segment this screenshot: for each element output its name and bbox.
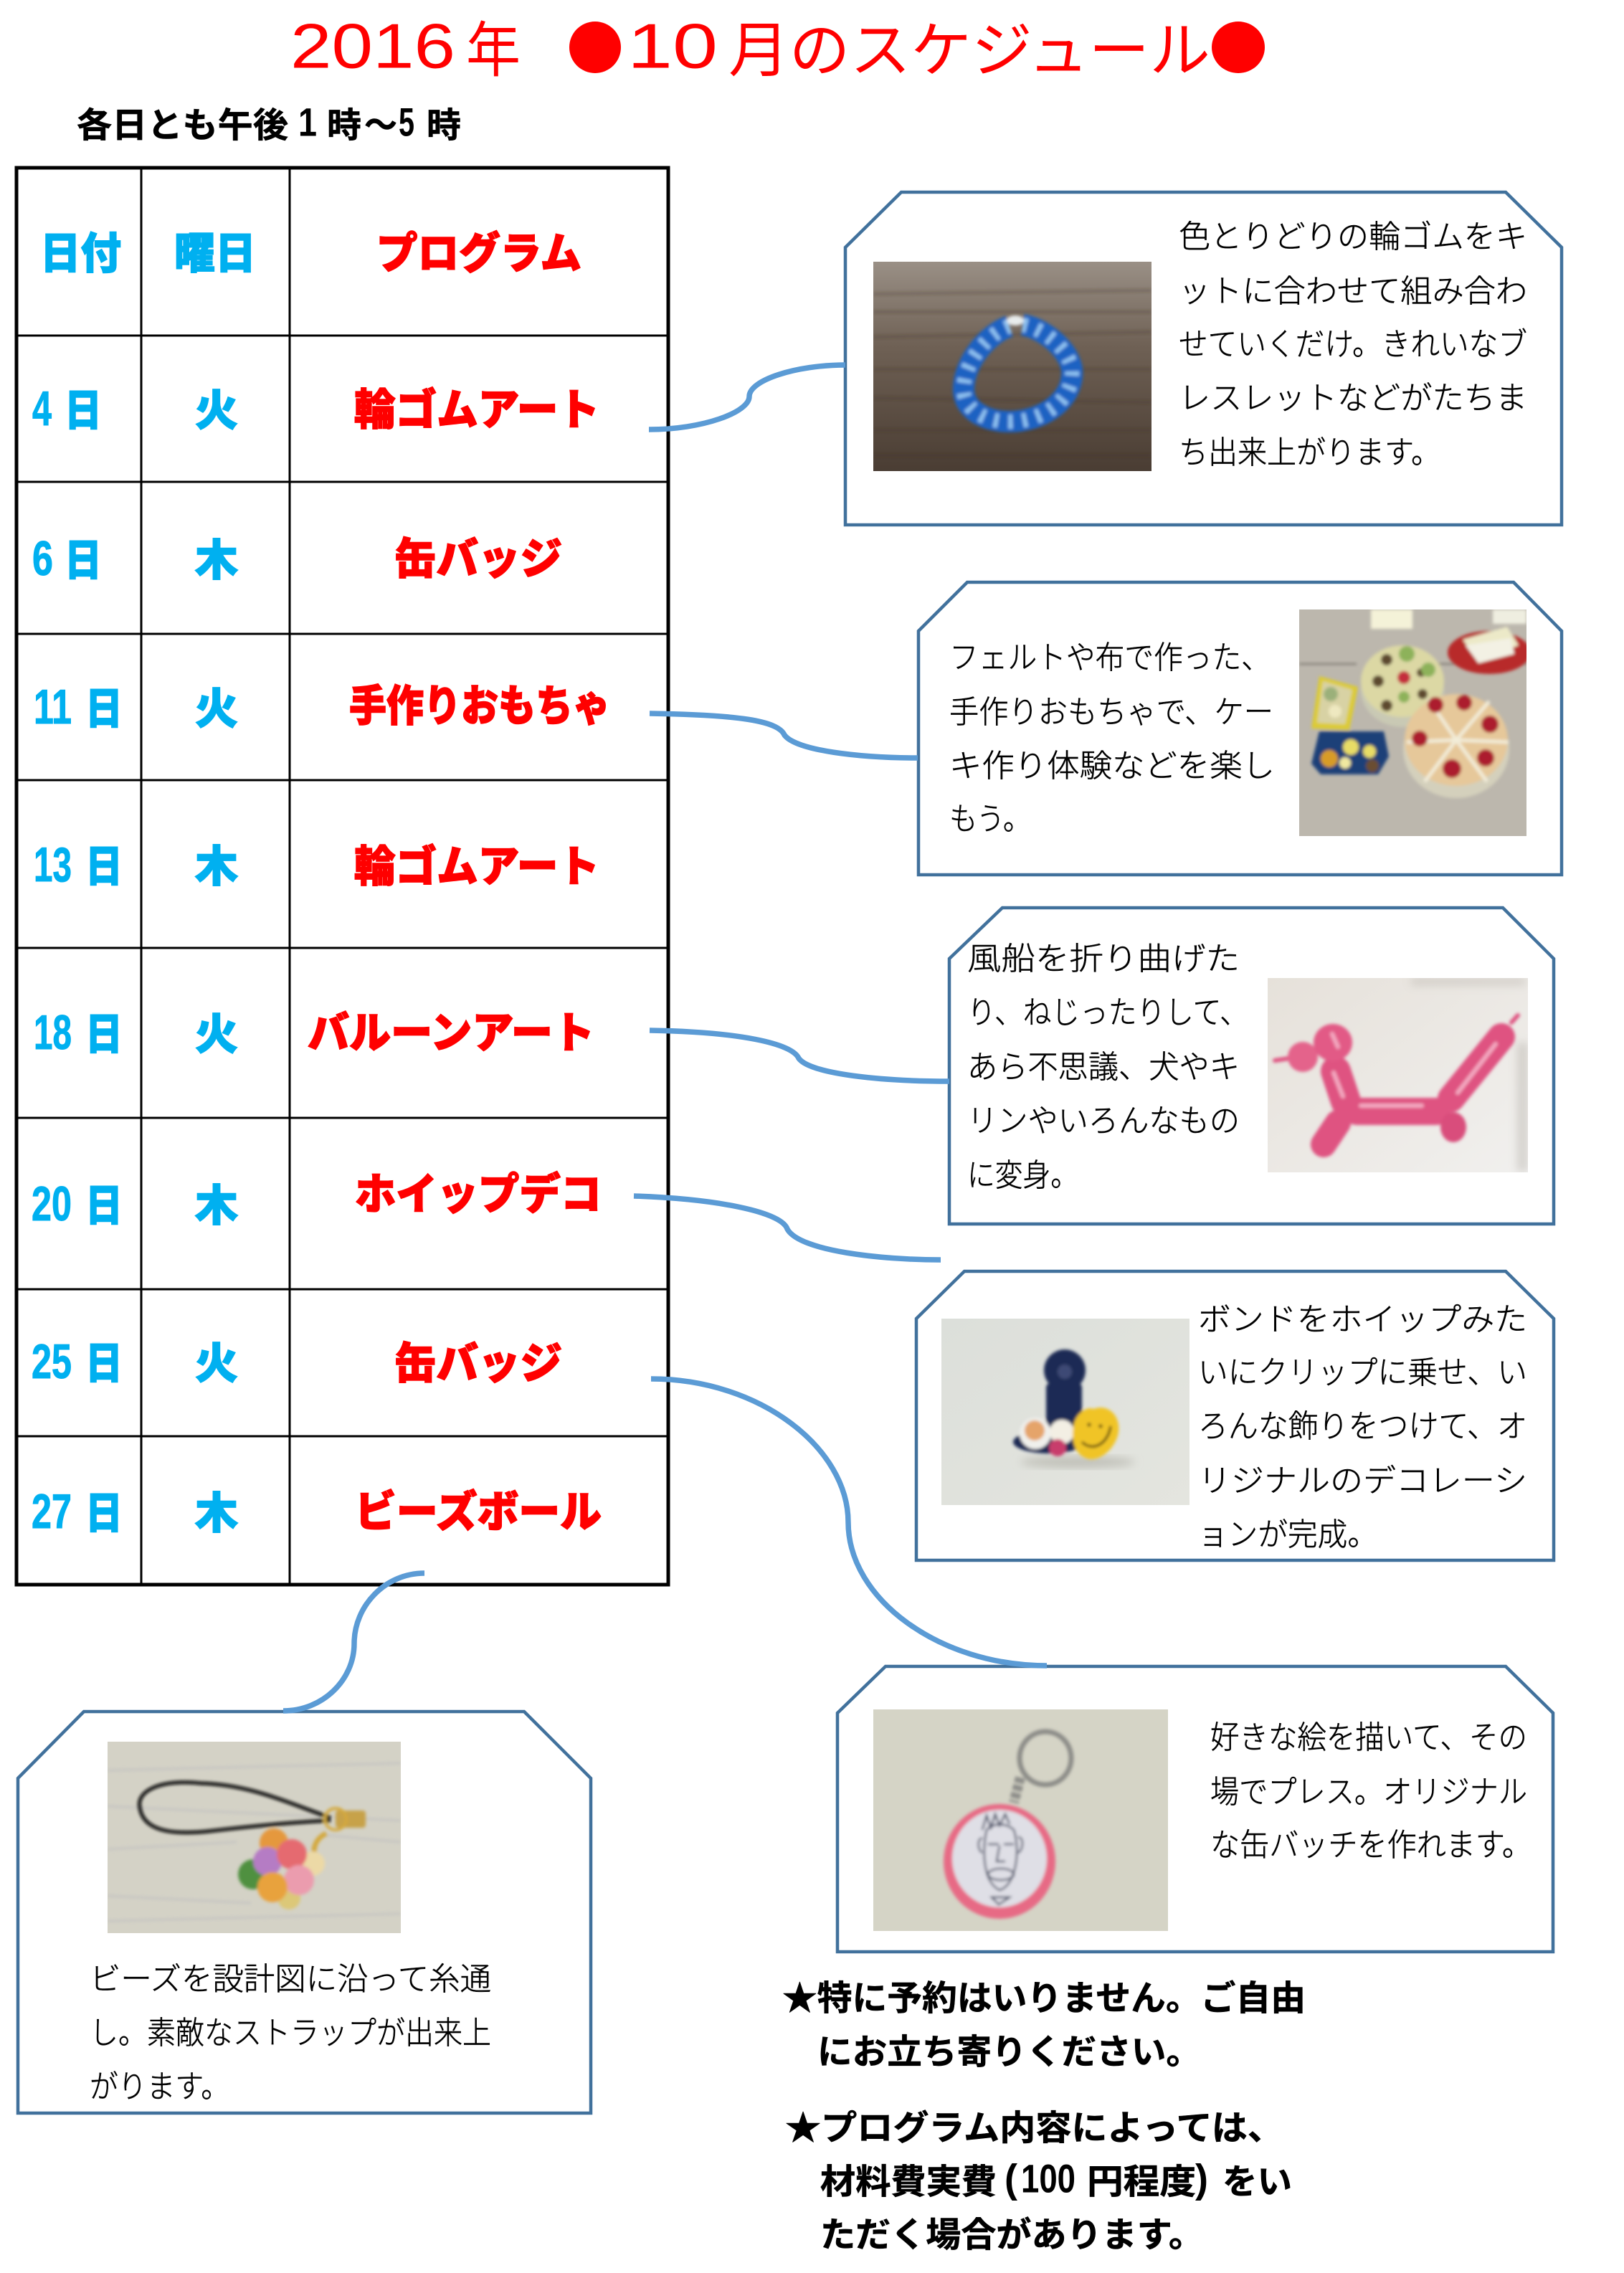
row: 13日: 木 bbox=[195, 832, 238, 895]
description text: あら不思議、犬やキ bbox=[967, 1041, 1240, 1087]
row: 27日: 日 bbox=[85, 1479, 123, 1542]
subtitle: opening hours: 1 bbox=[298, 99, 317, 145]
title: 月のスケジュール bbox=[728, 3, 1210, 89]
subtitle: opening hours: 各日とも午後 bbox=[77, 97, 288, 147]
row: 20日: 日 bbox=[85, 1172, 123, 1233]
subtitle: opening hours: 〜 bbox=[364, 97, 397, 147]
row: 11日 bbox=[34, 671, 610, 737]
row: 4日: 火 bbox=[195, 376, 238, 439]
row: 18日 bbox=[34, 998, 594, 1063]
connector: balloon art bbox=[650, 1030, 949, 1081]
row: 4日 bbox=[32, 376, 599, 439]
description text: レスレットなどがたちま bbox=[1179, 372, 1527, 418]
description text: もう。 bbox=[949, 793, 1031, 839]
row: 20日 bbox=[32, 1160, 602, 1233]
photo: bead strap bbox=[108, 1742, 401, 1933]
row: 18日: 日 bbox=[85, 1000, 123, 1063]
connector: handmade toys bbox=[650, 713, 918, 758]
description text: リジナルのデコレーシ bbox=[1198, 1455, 1527, 1501]
note: material fee: をい bbox=[1222, 2153, 1292, 2203]
photo: badge keychain bbox=[873, 1709, 1168, 1931]
row: 25日: 日 bbox=[85, 1329, 123, 1391]
row: 13日: 13 bbox=[34, 837, 72, 892]
subtitle: opening hours bbox=[77, 97, 461, 147]
header row: 曜日 bbox=[174, 219, 256, 281]
row: 13日: 輪ゴムアート bbox=[354, 832, 599, 895]
row: 13日: 日 bbox=[85, 832, 123, 895]
row: 18日: バルーンアート bbox=[308, 998, 594, 1061]
description text: せていくだけ。きれいなブ bbox=[1179, 318, 1527, 364]
description text bbox=[1179, 211, 1527, 473]
row: 11日: 手作りおもちゃ bbox=[349, 671, 610, 734]
note: material fee: ( bbox=[1005, 2155, 1017, 2201]
row: 4日: 4 bbox=[32, 381, 52, 436]
description text: ボンドをホイップみた bbox=[1198, 1294, 1527, 1339]
row: 27日: ビーズボール bbox=[355, 1477, 602, 1540]
panel: beads bbox=[18, 1712, 591, 2113]
note: no reservation: にお立ち寄りください。 bbox=[817, 2023, 1201, 2074]
description text: がります。 bbox=[90, 2061, 229, 2107]
description text: 手作りおもちゃで、ケー bbox=[949, 686, 1273, 732]
description text: キ作り体験などを楽し bbox=[949, 740, 1275, 786]
row: 20日: ホイップデコ bbox=[355, 1160, 602, 1222]
title: 年 bbox=[466, 3, 521, 89]
description text: 場でプレス。オリジナル bbox=[1210, 1766, 1527, 1812]
row: 25日: 缶バッジ bbox=[394, 1329, 562, 1391]
row: 6日 bbox=[32, 525, 562, 588]
note: material fee: 材料費実費 bbox=[820, 2153, 997, 2203]
description text: ビーズを設計図に沿って糸通 bbox=[90, 1953, 491, 1999]
description text: し。素敵なストラップが出来上 bbox=[90, 2007, 491, 2053]
photo: felt cakes bbox=[1299, 609, 1526, 836]
description text: ろんな飾りをつけて、オ bbox=[1198, 1400, 1527, 1446]
row: 11日: 日 bbox=[85, 674, 123, 737]
subtitle: opening hours: 時 bbox=[427, 97, 461, 147]
description text: り、ねじったりして、 bbox=[967, 987, 1248, 1033]
description text: リンやいろんなもの bbox=[967, 1095, 1240, 1141]
row: 25日 bbox=[32, 1329, 562, 1391]
row: 27日 bbox=[32, 1477, 602, 1542]
description text bbox=[90, 1953, 491, 2107]
row: 25日: 火 bbox=[195, 1329, 238, 1391]
description text: 風船を折り曲げた bbox=[967, 933, 1240, 979]
row: 11日: 火 bbox=[195, 674, 238, 737]
note: no reservation: ★特に予約はいりません。ご自由 bbox=[782, 1970, 1306, 2020]
schedule table bbox=[16, 168, 668, 1585]
description text bbox=[1198, 1294, 1527, 1555]
photo: deco clip bbox=[941, 1319, 1189, 1505]
description text: ットに合わせて組み合わ bbox=[1179, 265, 1527, 311]
connector: can badge bbox=[651, 1379, 1047, 1666]
photo: balloon dog bbox=[1268, 978, 1528, 1172]
row: 13日 bbox=[34, 832, 599, 895]
note: material fee: ) bbox=[1195, 2155, 1208, 2201]
row: 11日: 11 bbox=[34, 680, 72, 734]
header row: 日付 bbox=[40, 219, 121, 281]
row: 18日: 火 bbox=[195, 1000, 238, 1063]
title bbox=[290, 3, 1265, 89]
row: 18日: 18 bbox=[34, 1005, 72, 1060]
row: 6日: 木 bbox=[195, 526, 238, 588]
description text: いにクリップに乗せ、い bbox=[1198, 1347, 1527, 1392]
row: 20日: 20 bbox=[32, 1177, 72, 1231]
description text: フェルトや布で作った、 bbox=[949, 632, 1271, 678]
row: 25日: 25 bbox=[32, 1334, 72, 1389]
connector: beads bbox=[283, 1573, 424, 1711]
description text: 色とりどりの輪ゴムをキ bbox=[1179, 211, 1527, 257]
row: 6日: 6 bbox=[32, 531, 53, 586]
panel: handmade toys bbox=[918, 582, 1562, 875]
row: 6日: 日 bbox=[65, 526, 102, 588]
note: material fee: 100 bbox=[1021, 2155, 1075, 2201]
row: 4日: 輪ゴムアート bbox=[354, 376, 599, 437]
description text bbox=[967, 933, 1248, 1195]
description text: ョンが完成。 bbox=[1198, 1509, 1377, 1555]
note: material fee: ★プログラム内容によっては、 bbox=[785, 2099, 1283, 2150]
description text bbox=[1210, 1712, 1532, 1865]
panel: whipped deco bbox=[916, 1271, 1554, 1560]
header row: プログラム bbox=[376, 219, 581, 281]
note: no reservation bbox=[782, 1970, 1306, 2074]
panel: rubber band art bbox=[845, 192, 1562, 525]
note: material fee: 円程度 bbox=[1087, 2153, 1196, 2203]
connector: whipped deco bbox=[634, 1196, 941, 1260]
description text: な缶バッチを作れます。 bbox=[1210, 1819, 1532, 1865]
title: 2016 bbox=[290, 10, 455, 82]
connector: rubber band art bbox=[649, 365, 845, 430]
header row bbox=[40, 219, 581, 281]
row: 4日: 日 bbox=[65, 376, 102, 439]
description text: に変身。 bbox=[967, 1149, 1078, 1195]
description text bbox=[949, 632, 1275, 839]
subtitle: opening hours: 5 bbox=[399, 99, 414, 145]
photo: bracelet bbox=[873, 262, 1151, 471]
row: 6日: 缶バッジ bbox=[394, 525, 562, 587]
description text: 好きな絵を描いて、その bbox=[1210, 1712, 1527, 1757]
table grid bbox=[16, 168, 668, 1585]
row: 20日: 木 bbox=[195, 1172, 238, 1233]
title: 10 bbox=[627, 10, 718, 82]
subtitle: opening hours: 時 bbox=[327, 97, 361, 147]
row: 27日: 27 bbox=[32, 1484, 72, 1539]
note: material fee bbox=[785, 2099, 1292, 2257]
note: material fee: ただく場合があります。 bbox=[820, 2206, 1204, 2257]
panel: balloon art bbox=[949, 908, 1554, 1224]
panel: can badge bbox=[837, 1666, 1553, 1952]
description text: ち出来上がります。 bbox=[1179, 427, 1440, 473]
row: 27日: 木 bbox=[195, 1479, 238, 1542]
